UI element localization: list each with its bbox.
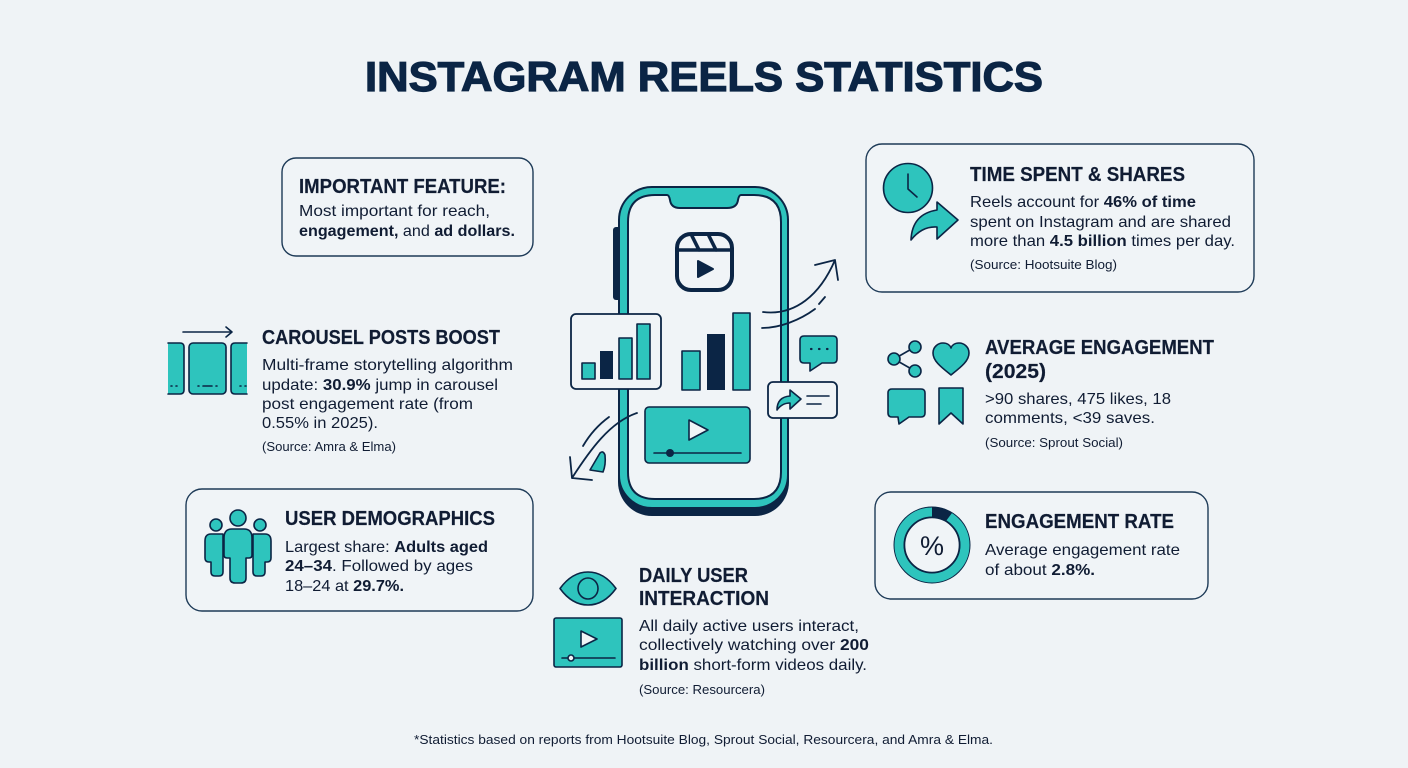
icon: carousel frames: [168, 327, 247, 394]
footnote: *Statistics based on reports from Hootsuite Blog, Sprout Social, Resourcera, and Amra & Elma.: [414, 732, 993, 747]
icon: chat bubble: [800, 336, 837, 371]
phone side button: [613, 227, 621, 300]
heading: daily user interaction: [639, 565, 769, 610]
source: Sprout Social: (Source: Sprout Social): [985, 436, 1123, 450]
arrow: down left: [570, 413, 637, 480]
text block: average engagement body: >90 shares, 475 likes, 18: [985, 391, 1171, 408]
icon: clock and share arrow: [884, 164, 958, 240]
panel: carousel posts boost: [168, 327, 513, 454]
icon: reels clapper: [677, 234, 732, 290]
text block: carousel body: Multi-frame storytelling algorithm: [262, 357, 513, 374]
text block: average engagement body: [985, 391, 1171, 427]
icon: heart: [933, 343, 969, 375]
text block: carousel body: [262, 357, 513, 432]
heading: time spent and shares: TIME SPENT & SHARES: [970, 164, 1185, 186]
panel: engagement rate: [875, 492, 1208, 599]
panel: daily user interaction: [554, 565, 869, 697]
source: Resourcera: (Source: Resourcera): [639, 683, 765, 697]
text block: demographics body: [285, 539, 488, 595]
text block: time spent body: Reels account for 46% of time: [970, 194, 1196, 211]
heading: daily user interaction: INTERACTION: [639, 588, 769, 610]
icon: bookmark: [939, 388, 963, 424]
text block: time spent body: spent on Instagram and are shared: [970, 214, 1231, 231]
panel: time spent and shares: [866, 144, 1254, 292]
heading: carousel posts boost: CAROUSEL POSTS BOOST: [262, 327, 500, 349]
text block: carousel body: post engagement rate (from: [262, 396, 473, 413]
icon: video player: [554, 618, 622, 667]
icon: donut chart: %: [920, 531, 944, 561]
text block: engagement rate body: of about 2.8%.: [985, 562, 1095, 579]
text block: engagement rate body: [985, 542, 1180, 579]
panel: user demographics: [186, 489, 533, 611]
text block: important feature body: [299, 203, 515, 240]
panel: small bar chart: [571, 314, 661, 389]
panel: average engagement: [888, 337, 1214, 450]
text block: daily user body: All daily active users interact,: [639, 618, 859, 635]
text block: demographics body: 24–34. Followed by ages: [285, 558, 473, 575]
arrow: up right: [762, 260, 838, 328]
text block: time spent body: more than 4.5 billion times per day.: [970, 233, 1235, 250]
text block: demographics body: 18–24 at 29.7%.: [285, 578, 404, 595]
source: Hootsuite Blog: (Source: Hootsuite Blog): [970, 258, 1117, 272]
phone illustration: [570, 187, 838, 516]
heading: engagement rate: ENGAGEMENT RATE: [985, 511, 1174, 533]
text block: demographics body: Largest share: Adults aged: [285, 539, 488, 556]
heading: important feature: IMPORTANT FEATURE:: [299, 176, 506, 198]
text block: important feature body: Most important for reach,: [299, 203, 490, 220]
icon: donut chart: [899, 507, 965, 578]
text block: time spent body: [970, 194, 1235, 250]
text block: carousel body: update: 30.9% jump in carousel: [262, 377, 498, 394]
text block: daily user body: collectively watching over 200: [639, 637, 869, 654]
icon: comment bubble: [888, 389, 925, 424]
heading: average engagement: [985, 337, 1214, 383]
icon: eye: [560, 572, 616, 605]
title: INSTAGRAM REELS STATISTICS: [365, 53, 1043, 100]
text block: important feature body: engagement, and ad dollars.: [299, 223, 515, 240]
panel: share card: [768, 382, 837, 418]
text block: engagement rate body: Average engagement rate: [985, 542, 1180, 559]
text block: carousel body: 0.55% in 2025).: [262, 415, 378, 432]
text block: average engagement body: comments, <39 saves.: [985, 410, 1155, 427]
panel: important feature: [282, 158, 533, 256]
icon: share nodes: [888, 341, 921, 377]
heading: average engagement: (2025): [985, 361, 1046, 383]
heading: user demographics: USER DEMOGRAPHICS: [285, 508, 495, 530]
bar chart: phone screen: [682, 313, 750, 390]
phone body: [618, 187, 789, 516]
heading: average engagement: AVERAGE ENGAGEMENT: [985, 337, 1214, 359]
source: Amra & Elma: (Source: Amra & Elma): [262, 440, 396, 454]
icon: people group: [205, 510, 271, 583]
video player: [645, 407, 750, 463]
text block: daily user body: [639, 618, 869, 674]
text block: daily user body: billion short-form videos daily.: [639, 657, 867, 674]
heading: daily user interaction: DAILY USER: [639, 565, 748, 587]
